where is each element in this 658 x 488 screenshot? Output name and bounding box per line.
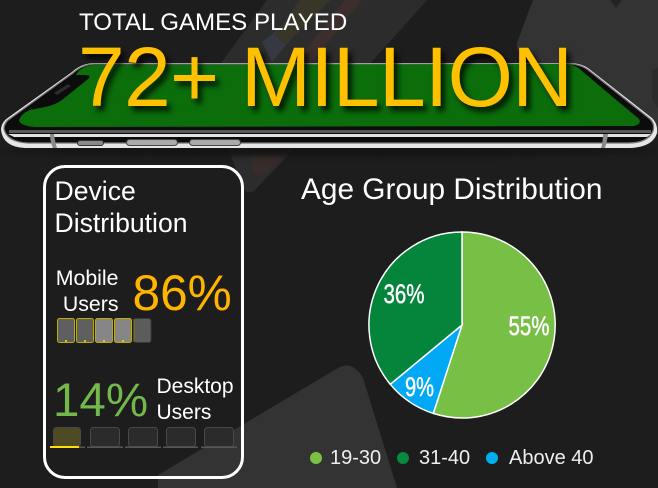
subtitle: total games played: TOTAL GAMES PLAYED xyxy=(79,8,347,36)
slice: above 40 9% xyxy=(390,325,462,413)
desktop percentage: 14% xyxy=(53,374,148,426)
panel heading: Device xyxy=(54,176,136,206)
green screen xyxy=(19,64,640,127)
legend item above 40: Above 40 xyxy=(509,447,594,469)
label 55%: 55% xyxy=(508,311,550,341)
legend item 31-40 xyxy=(397,447,470,469)
desktop users label: Users xyxy=(156,400,211,424)
pie chart xyxy=(368,231,556,419)
legend item 19-30: 19-30 xyxy=(330,447,381,469)
mobile users label: Mobile xyxy=(56,266,118,290)
desktop users label: Desktop xyxy=(156,374,234,398)
mobile users label: Users xyxy=(63,292,118,316)
phone body xyxy=(1,63,657,148)
label 9%: 9% xyxy=(405,372,434,402)
panel heading xyxy=(54,176,188,238)
legend item 31-40: 31-40 xyxy=(419,447,470,469)
side buttons xyxy=(78,140,104,146)
label 36%: 36% xyxy=(384,279,424,309)
slice: 31-40 36% xyxy=(369,232,462,384)
heading: age group distribution: Age Group Distribution xyxy=(301,173,602,206)
mobile users label xyxy=(56,266,118,316)
desktop users label xyxy=(156,374,234,424)
headline: 72+ million: 72+ MILLION xyxy=(78,30,572,124)
panel heading: Distribution xyxy=(54,208,188,238)
slice: 19-30 55% xyxy=(433,232,555,418)
mobile icons xyxy=(57,318,152,343)
mobile percentage: 86% xyxy=(132,264,232,320)
legend xyxy=(310,447,594,469)
speaker in notch xyxy=(54,84,71,95)
desktop icons xyxy=(50,427,237,448)
panel: device distribution xyxy=(42,165,244,479)
